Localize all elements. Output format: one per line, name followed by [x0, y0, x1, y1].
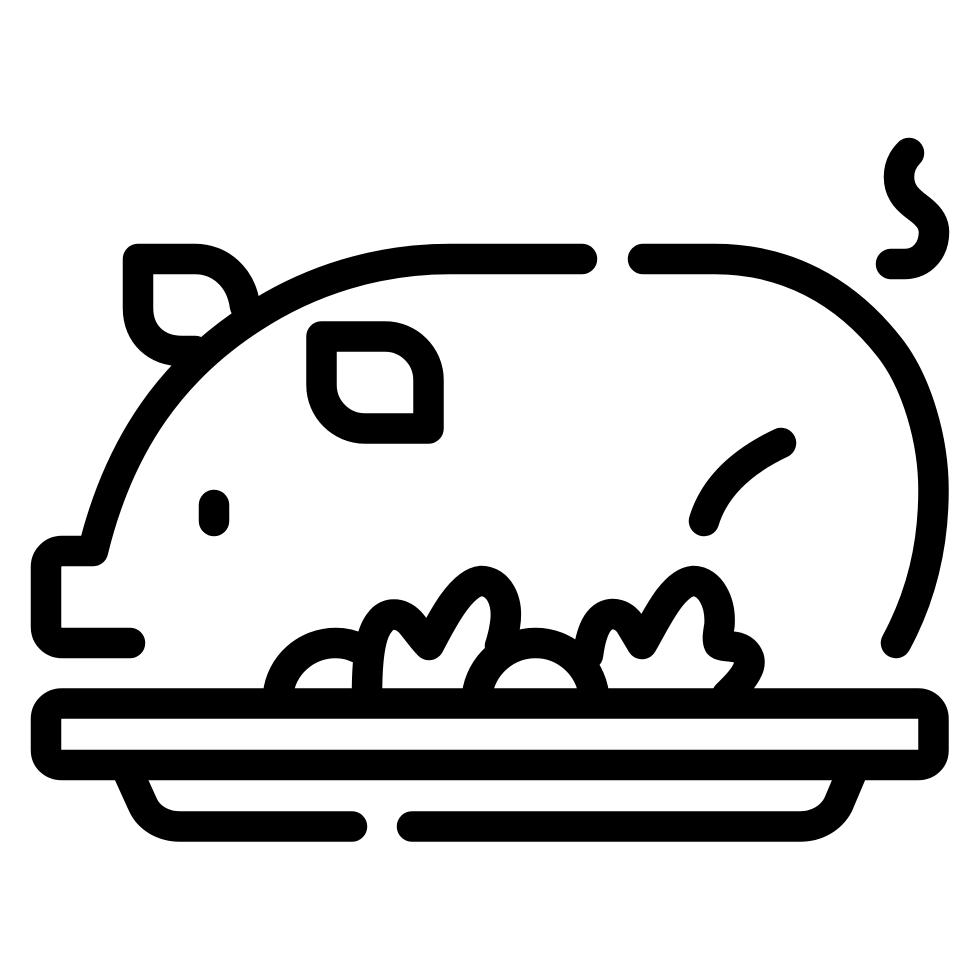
pig rump [643, 259, 934, 643]
garnish: leaf left [367, 581, 506, 695]
pig ear [138, 259, 245, 351]
pig body back and snout [46, 259, 582, 643]
pig eye [199, 505, 229, 521]
pig eye patch [322, 336, 428, 428]
garnish: leaf right [588, 581, 749, 695]
platter rim [46, 704, 934, 765]
platter base [128, 772, 852, 826]
steam wisp [891, 153, 934, 264]
garnish: round vegetable left [278, 643, 358, 695]
pig leg crease [704, 443, 781, 521]
garnish: round vegetable centre [477, 643, 594, 695]
